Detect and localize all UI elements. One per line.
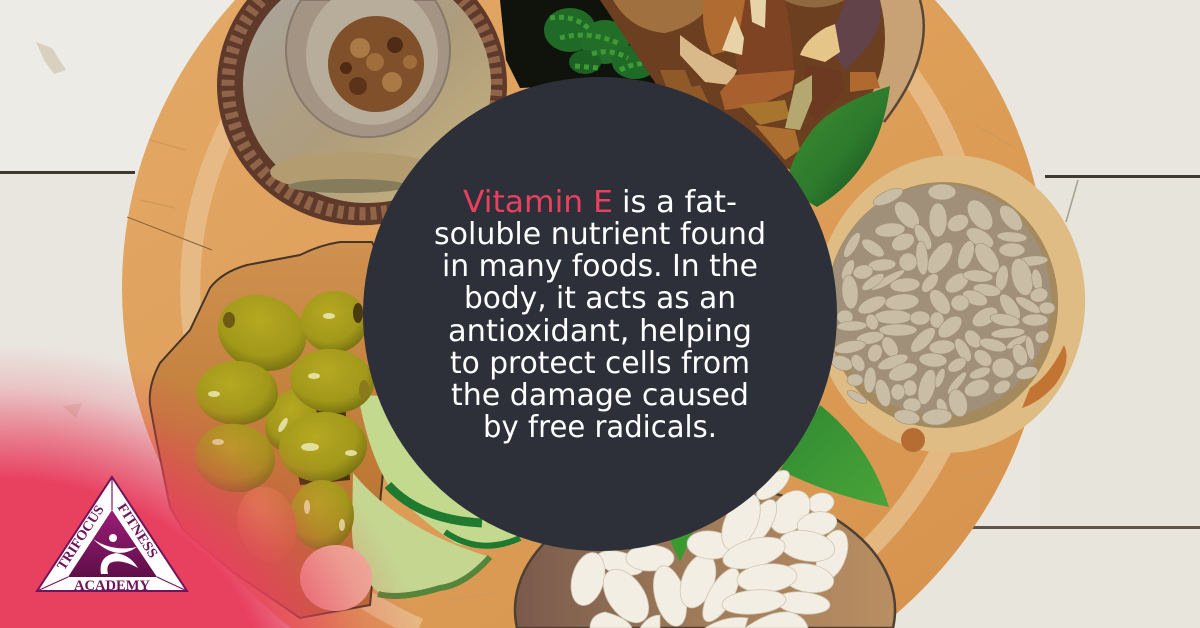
body text: Vitamin E: [463, 185, 613, 220]
leaf: lower: [780, 405, 889, 507]
wooden platter: [122, 0, 1048, 628]
bowl: oil jar with spice: [217, 0, 507, 225]
logo text: TRIFOCUS: [55, 503, 108, 573]
leaf: upper: [788, 86, 890, 207]
body text: the damage caused: [451, 378, 749, 413]
olive highlights: [208, 313, 357, 531]
body text: to protect cells from: [450, 346, 750, 381]
seeds: [829, 184, 1055, 426]
logo text: [55, 501, 160, 594]
logo text: ACADEMY: [74, 578, 150, 594]
dish: olives and cucumber: [150, 242, 522, 618]
logo: Trifocus Fitness Academy: [37, 477, 187, 594]
body text: antioxidant, helping: [448, 314, 752, 349]
dark circle with text: [363, 77, 837, 551]
herbs: [500, 0, 665, 88]
walnuts: [613, 0, 881, 160]
logo figure: [93, 534, 138, 574]
body text: [434, 185, 766, 445]
logo text: FITNESS: [114, 501, 160, 561]
body text: is a fat-: [622, 185, 737, 220]
olives: [190, 283, 377, 611]
dish: pumpkin seeds: [515, 465, 895, 628]
body text: soluble nutrient found: [434, 217, 766, 252]
red gradient corner: [0, 340, 440, 628]
body text: by free radicals.: [483, 410, 717, 445]
spice circle: [328, 16, 424, 112]
cucumber: [352, 395, 522, 596]
body text: body, it acts as an: [464, 281, 736, 316]
dish of walnuts: [600, 0, 924, 170]
bowl: sunflower seeds: [800, 142, 1100, 466]
body text: in many foods. In the: [442, 249, 758, 284]
